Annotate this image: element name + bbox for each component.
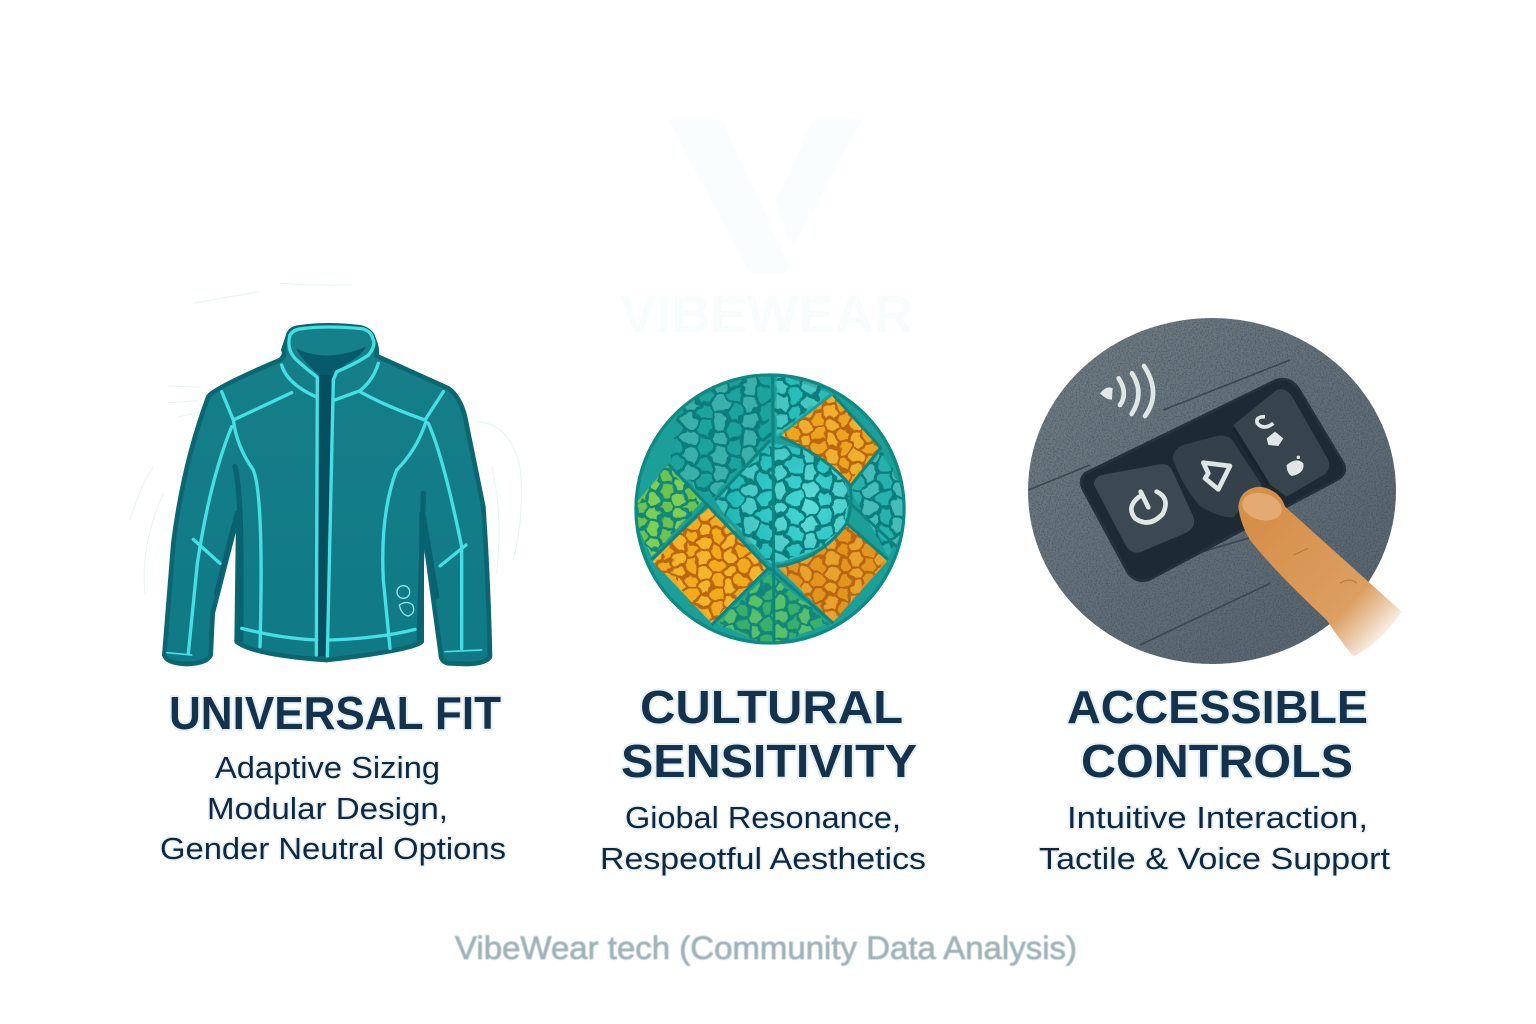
- text: respectful aesthetics: Respeotful Aesthetics: [600, 841, 926, 876]
- heading: controls: CONTROLS: [1081, 735, 1353, 787]
- green cobble texture: [630, 465, 828, 647]
- icon: control pad with finger: [1027, 317, 1402, 667]
- faint motion sketch lines: [130, 283, 521, 593]
- text: tactile and voice support: Tactile & Voice Support: [1039, 841, 1390, 876]
- amber cobble texture: [652, 395, 888, 623]
- heading: accessible: ACCESSIBLE: [1067, 681, 1368, 733]
- mosaic base disc: [636, 375, 904, 643]
- pointing finger: [1238, 487, 1402, 657]
- collar interior: [293, 332, 368, 375]
- mosaic rim: [636, 375, 904, 643]
- icon: patterned mosaic circle: [630, 367, 917, 647]
- pocket icons: [397, 586, 414, 616]
- zipper placket: [317, 375, 333, 657]
- mosaic colour regions: [638, 376, 902, 642]
- text: intuitive interaction: Intuitive Interaction,: [1067, 800, 1368, 835]
- heading: sensitivity: SENSITIVITY: [621, 735, 917, 787]
- icon: jacket: [164, 325, 490, 664]
- logo mark V: [668, 119, 862, 274]
- navigation button: [1173, 436, 1262, 517]
- power button: [1094, 464, 1194, 553]
- footer source line: VibeWear tech (Community Data Analysis): [455, 930, 1077, 966]
- text: adaptive sizing: Adaptive Sizing: [215, 750, 440, 785]
- watermark logo: [620, 119, 913, 344]
- mosaic divider lines: [652, 373, 897, 643]
- mode glyphs: [1257, 417, 1273, 427]
- heading: cultural: CULTURAL: [640, 681, 903, 733]
- infographic canvas: [130, 283, 1402, 966]
- glowing seams: [167, 327, 482, 656]
- fabric grain: [1027, 317, 1400, 667]
- text: gender neutral options: Gender Neutral Options: [160, 831, 506, 866]
- jacket silhouette: [164, 325, 490, 664]
- teal cobble texture: [670, 377, 902, 563]
- panel: accessible controls: [1027, 317, 1402, 876]
- text: modular design: Modular Design,: [207, 791, 448, 826]
- logo wordmark: VIBEWEAR: [620, 286, 913, 344]
- button panel: [1081, 379, 1345, 581]
- fabric disc: [1028, 318, 1396, 664]
- panel: cultural sensitivity: [600, 367, 926, 876]
- heading: universal fit: UNIVERSAL FIT: [169, 687, 501, 739]
- voice wave icon: [1100, 366, 1153, 416]
- body side shadows: [217, 467, 437, 640]
- mode button: [1233, 389, 1329, 497]
- fingernail: [1239, 489, 1285, 524]
- panel: universal fit: [130, 283, 521, 866]
- text: global resonance: Giobal Resonance,: [625, 800, 901, 835]
